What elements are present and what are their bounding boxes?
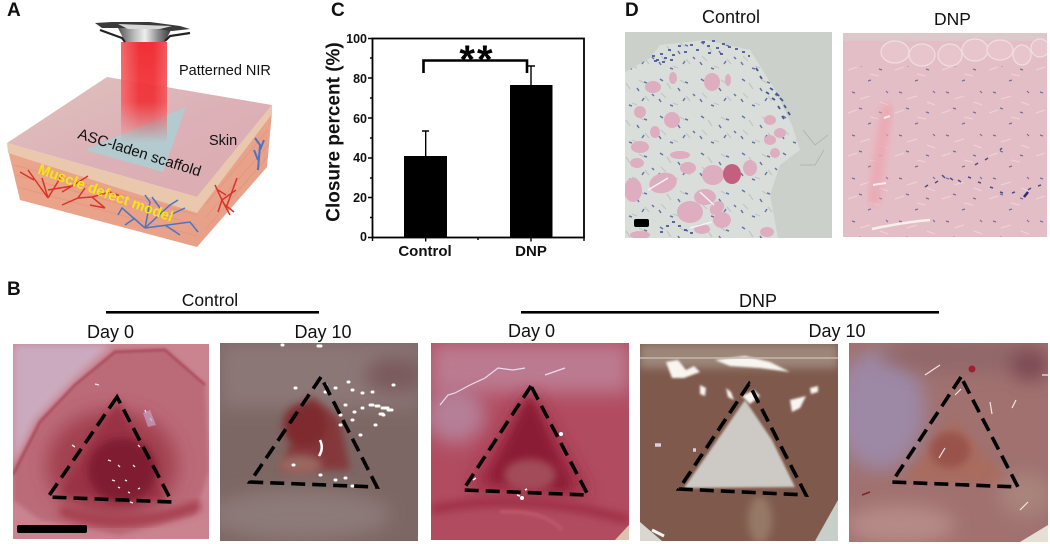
group rule: Control	[106, 311, 319, 314]
icon: lens	[95, 22, 190, 42]
bar: Control	[404, 131, 447, 237]
heading: panel A letter: A	[7, 0, 21, 21]
x tick labels	[398, 243, 547, 260]
significance stars: **	[459, 38, 495, 82]
specks	[925, 365, 1048, 510]
label: Control Day 0: Day 0	[87, 322, 134, 342]
label: Skin: Skin	[209, 133, 237, 149]
photo: Control Day 0	[13, 344, 209, 539]
bar: DNP	[510, 66, 552, 237]
panel D: histology	[624, 0, 1049, 239]
label: DNP Day 10: Day 10	[808, 321, 866, 341]
y tick labels: 60	[353, 112, 367, 126]
scaffold patch	[684, 400, 795, 488]
y tick labels: 20	[353, 191, 367, 205]
icon: red blood vessels	[20, 170, 237, 215]
label: DNP Day 0: Day 0	[508, 321, 555, 341]
dashed outline	[48, 397, 172, 502]
photo: DNP Day 0	[425, 343, 629, 540]
panel C: bar chart of closure percent	[324, 0, 584, 260]
icon: blue blood vessels	[118, 138, 264, 235]
photo: DNP Day 10 second sample	[849, 343, 1048, 542]
group label: DNP: DNP	[739, 291, 777, 311]
scale bar	[17, 525, 87, 533]
panel B: wound photographs	[7, 279, 1050, 544]
histology image: DNP	[843, 33, 1049, 237]
label: Patterned NIR: Patterned NIR	[179, 63, 271, 79]
scaffold triangle	[85, 107, 186, 172]
heading: panel C letter: C	[331, 0, 345, 21]
label: Muscle defect model: Muscle defect model	[36, 162, 175, 226]
specks	[282, 345, 394, 486]
x tick labels: Control	[398, 243, 452, 260]
dashed outline	[892, 377, 1018, 487]
dashed outline	[679, 384, 806, 495]
photo: DNP Day 10	[640, 344, 838, 544]
heading: panel B letter: B	[7, 279, 21, 300]
group rule: DNP	[521, 311, 939, 314]
specks	[72, 384, 152, 503]
x tick labels: DNP	[515, 243, 547, 260]
y tick labels: 0	[360, 230, 367, 244]
histology image: Control	[624, 32, 832, 239]
label: ASC-laden scaffold: ASC-laden scaffold	[76, 126, 203, 180]
dashed outline	[250, 377, 377, 487]
y tick labels: 80	[353, 72, 367, 86]
y axis title: Closure percent (%)	[324, 42, 344, 222]
panel A: schematic of patterned NIR on skin and muscle block	[7, 0, 272, 247]
significance bracket	[424, 60, 527, 73]
label: Control Day 10: Day 10	[294, 322, 352, 342]
muscle block	[8, 112, 272, 247]
highlights	[666, 356, 818, 412]
axes frame and ticks	[368, 38, 584, 242]
heading: panel D letter: D	[625, 0, 639, 21]
label: Control: Control	[702, 7, 760, 27]
dashed outline	[463, 386, 588, 495]
specks	[440, 368, 565, 405]
y tick labels: 100	[346, 32, 367, 46]
label: DNP: DNP	[934, 9, 971, 29]
photo: Control Day 10	[210, 343, 425, 541]
skin block	[7, 77, 272, 213]
NIR beam	[121, 42, 167, 142]
group label: Control: Control	[182, 290, 238, 310]
y tick labels	[346, 32, 367, 244]
scale bar	[634, 219, 649, 227]
y tick labels: 40	[353, 151, 367, 165]
